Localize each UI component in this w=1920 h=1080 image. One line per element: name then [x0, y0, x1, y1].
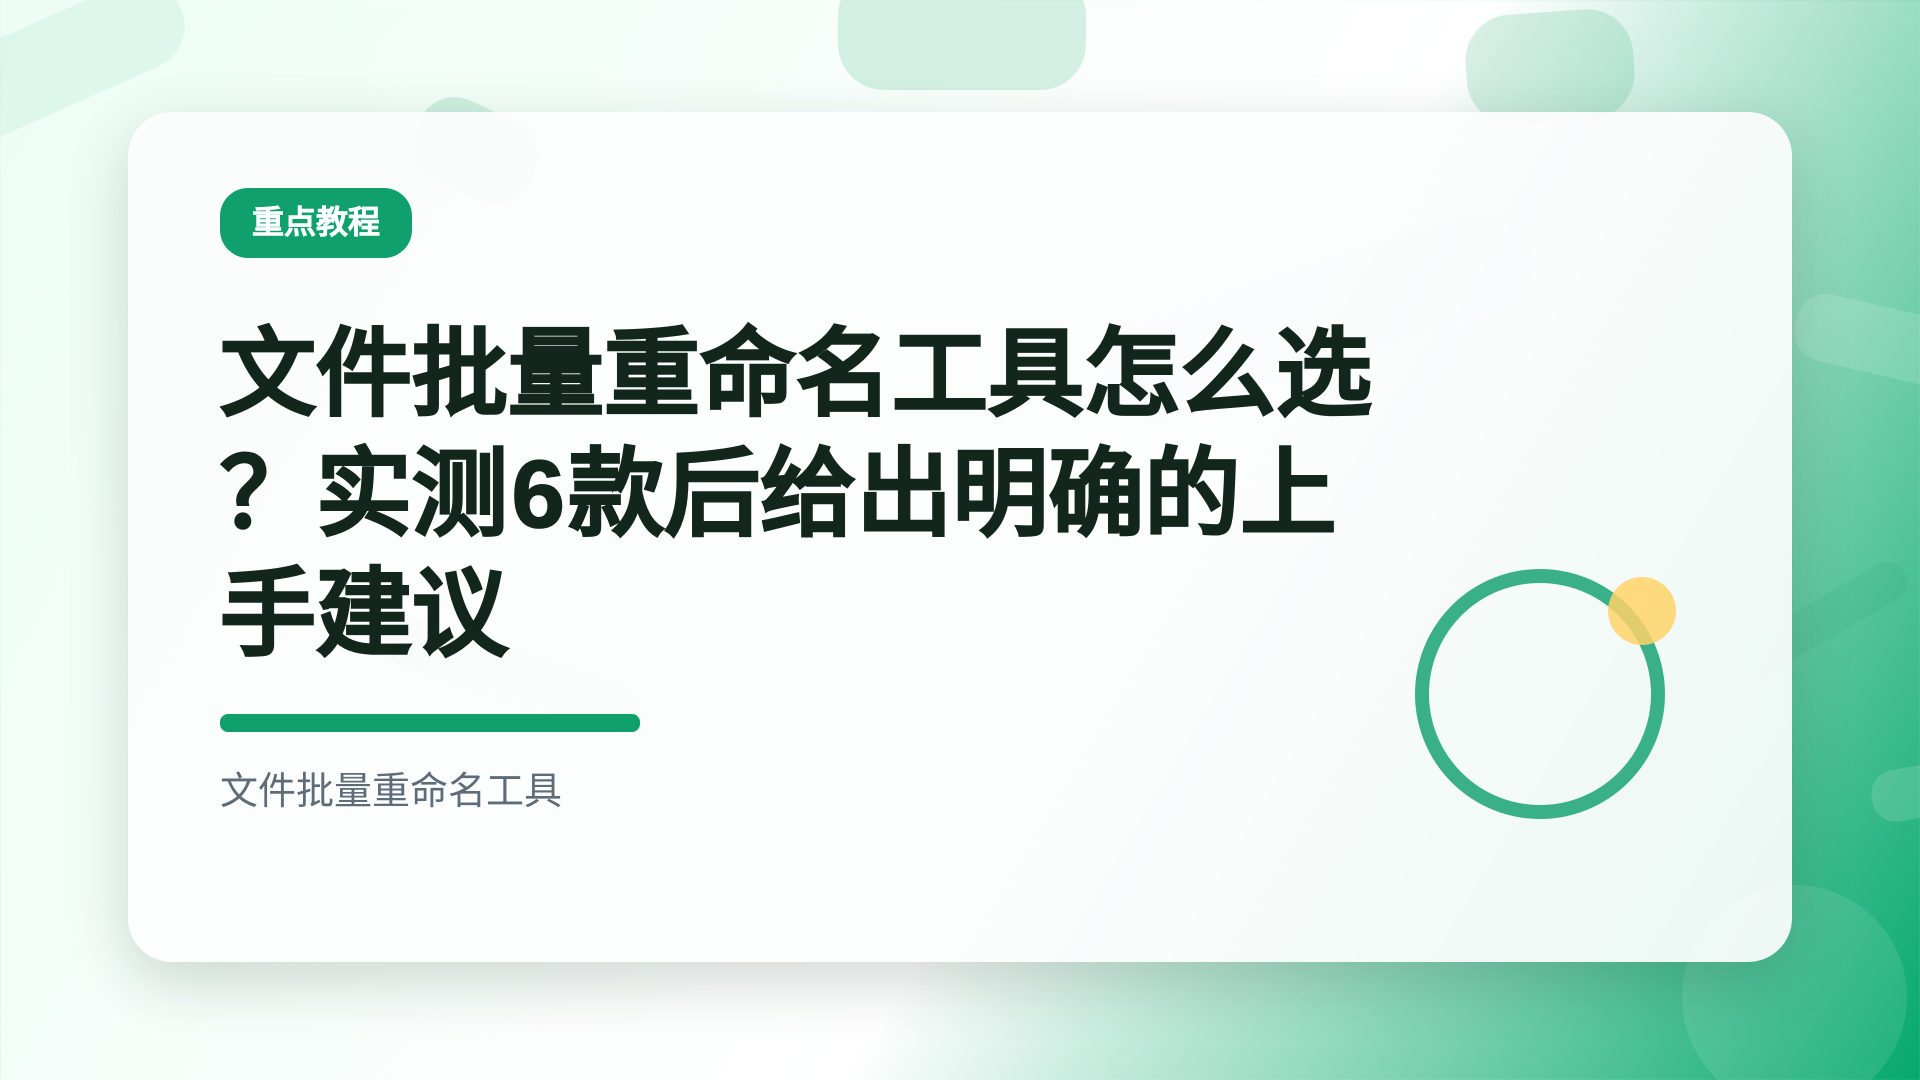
panel: main card [128, 112, 1792, 962]
accent divider bar [220, 714, 640, 732]
background shape: right small light bar [1867, 747, 1920, 826]
background shape: right dark diagonal bar [1635, 555, 1915, 739]
subtitle: 文件批量重命名工具 [220, 771, 562, 813]
background shape: faint band behind card upper right [1095, 199, 1545, 431]
decoration: green ring [1415, 569, 1665, 819]
title: 手建议 [220, 561, 508, 668]
background shape: small tilted blob behind card [399, 85, 550, 216]
title: ？实测6款后给出明确的上 [220, 441, 1336, 548]
title: 文件批量重命名工具怎么选 [220, 321, 1372, 428]
badge: 重点教程 [220, 188, 412, 258]
decoration: yellow dot [1608, 577, 1676, 645]
background shape: bottom-right circle [1682, 885, 1907, 1080]
background shape: faint band behind card left [379, 611, 641, 739]
badge: 重点教程: 重点教程 [252, 204, 380, 240]
background shape: top-center rounded block [838, 0, 1086, 90]
background shape: right light bar [1788, 288, 1920, 422]
background shape: top-right rounded block [1462, 6, 1638, 128]
background shape: top-left diagonal bar [0, 0, 199, 252]
title [220, 321, 1372, 668]
